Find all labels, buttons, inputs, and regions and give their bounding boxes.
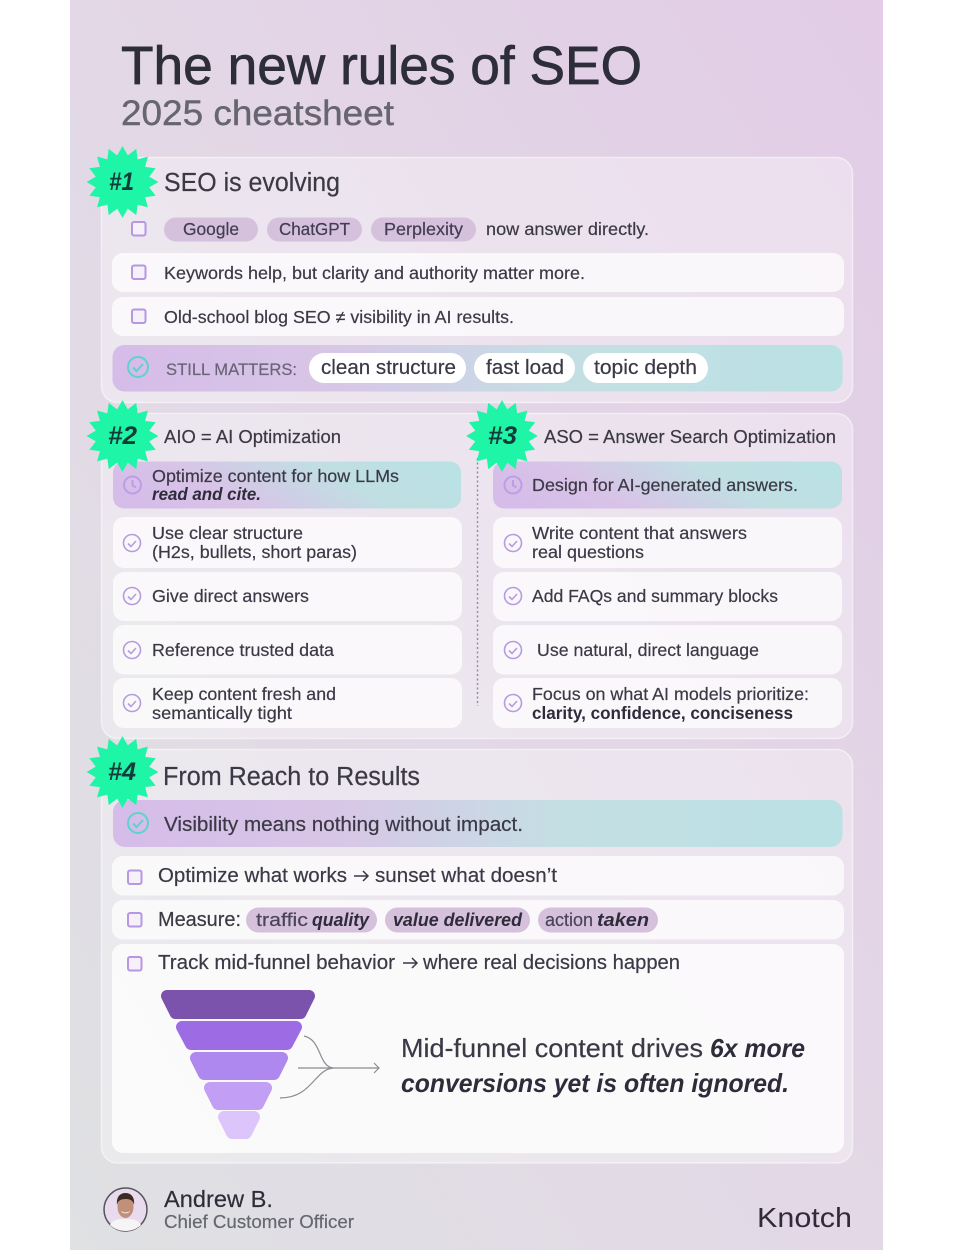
heading: ASO: ASO = Answer Search Optimization bbox=[544, 426, 836, 447]
row: measure: action bbox=[545, 910, 593, 930]
dotted divider bbox=[476, 458, 478, 706]
row: measure: traffic bbox=[256, 910, 308, 930]
row: still matters: topic depth bbox=[594, 357, 697, 379]
row: visibility bbox=[113, 800, 842, 847]
row: optimize what works: sunset what doesn’t bbox=[375, 865, 557, 887]
item: read and cite: read and cite. bbox=[152, 484, 261, 504]
badge: #4: #4 bbox=[108, 758, 136, 786]
panel: SEO is evolving bbox=[102, 158, 852, 402]
row: old-school blog SEO: Old-school blog SEO ≠ visibility in AI results. bbox=[164, 307, 514, 327]
item: read and cite: Optimize content for how LLMs bbox=[152, 466, 399, 486]
item: fresh content bbox=[113, 678, 462, 728]
row: measure bbox=[112, 900, 844, 940]
row: old-school blog SEO bbox=[112, 297, 844, 336]
row: measure: Measure: bbox=[158, 909, 241, 931]
item: AI priorities: clarity, confidence, conciseness bbox=[532, 703, 793, 723]
row: optimize what works: Optimize what works bbox=[158, 865, 347, 887]
badge: #1: #1 bbox=[109, 168, 134, 196]
arrow bbox=[354, 871, 368, 881]
heading: AIO: AIO = AI Optimization bbox=[164, 426, 341, 447]
footer: author: Chief Customer Officer bbox=[164, 1212, 354, 1232]
arrow bbox=[403, 958, 417, 968]
panel: AIO and ASO bbox=[102, 414, 852, 738]
callout text: Mid-funnel content drives bbox=[401, 1033, 703, 1063]
icon: author avatar bbox=[104, 1188, 147, 1231]
item: read and cite bbox=[113, 462, 461, 508]
row: keywords bbox=[112, 253, 844, 292]
row: keywords: Keywords help, but clarity and authority matter more. bbox=[164, 263, 585, 283]
badge: #3: #3 bbox=[488, 422, 517, 450]
item: clear structure: (H2s, bullets, short paras) bbox=[152, 542, 357, 562]
panel: From Reach to Results bbox=[102, 750, 852, 1163]
row: measure: value delivered bbox=[393, 910, 523, 930]
title: The new rules of SEO bbox=[121, 36, 642, 96]
footer: author bbox=[104, 1186, 354, 1232]
row: still matters bbox=[112, 345, 842, 392]
badge: #1 bbox=[87, 146, 158, 218]
item: real questions bbox=[493, 517, 842, 568]
logo: Knotch: Knotch bbox=[757, 1202, 852, 1233]
row: measure: quality bbox=[312, 910, 370, 930]
badge: #3 bbox=[466, 400, 538, 472]
heading: From Reach to Results: From Reach to Results bbox=[163, 763, 420, 791]
item: natural language bbox=[493, 625, 842, 674]
item: clear structure: Use clear structure bbox=[152, 523, 303, 543]
item: AI-generated answers bbox=[493, 462, 842, 508]
item: direct answers: Give direct answers bbox=[152, 586, 309, 606]
item: real questions: real questions bbox=[532, 542, 644, 562]
item: direct answers bbox=[113, 572, 462, 621]
row: answer engines: Perplexity bbox=[384, 219, 463, 239]
row: answer engines: now answer directly. bbox=[486, 219, 649, 239]
row: still matters: fast load bbox=[486, 357, 564, 379]
item: FAQs: Add FAQs and summary blocks bbox=[532, 586, 778, 606]
row: still matters: clean structure bbox=[321, 357, 456, 379]
row: mid-funnel bbox=[112, 944, 844, 1153]
badge: #4 bbox=[87, 736, 158, 808]
row: optimize what works bbox=[112, 856, 844, 896]
row: answer engines: ChatGPT bbox=[279, 219, 350, 239]
item: fresh content: Keep content fresh and bbox=[152, 684, 336, 704]
row: measure: taken bbox=[597, 910, 649, 930]
callout text: 6x more bbox=[710, 1033, 805, 1063]
item: trusted data bbox=[113, 625, 462, 674]
row: answer engines bbox=[132, 218, 649, 242]
item: FAQs bbox=[493, 572, 842, 621]
item: AI priorities bbox=[493, 678, 842, 728]
item: AI priorities: Focus on what AI models prioritize: bbox=[532, 684, 809, 704]
callout text bbox=[401, 1033, 805, 1098]
badge: #2 bbox=[87, 400, 158, 472]
row: visibility: Visibility means nothing without impact. bbox=[164, 813, 523, 836]
item: clear structure bbox=[113, 517, 462, 568]
footer: author: Andrew B. bbox=[164, 1186, 273, 1212]
row: answer engines: Google bbox=[183, 219, 239, 239]
arrow: funnel callout bbox=[280, 1036, 379, 1098]
badge: #2: #2 bbox=[108, 422, 137, 450]
heading: SEO is evolving: SEO is evolving bbox=[164, 169, 340, 197]
item: real questions: Write content that answers bbox=[532, 523, 747, 543]
callout text: conversions yet is often ignored. bbox=[401, 1068, 789, 1098]
row: still matters: STILL MATTERS: bbox=[166, 361, 297, 379]
icon: teal check bbox=[128, 357, 148, 377]
row: mid-funnel: where real decisions happen bbox=[422, 952, 680, 974]
subtitle: 2025 cheatsheet bbox=[121, 94, 394, 133]
item: AI-generated answers: Design for AI-generated answers. bbox=[532, 475, 798, 495]
row: mid-funnel: Track mid-funnel behavior bbox=[158, 952, 395, 974]
item: trusted data: Reference trusted data bbox=[152, 640, 334, 660]
item: fresh content: semantically tight bbox=[152, 703, 292, 723]
funnel chart bbox=[167, 996, 309, 1133]
item: natural language: Use natural, direct language bbox=[537, 640, 759, 660]
